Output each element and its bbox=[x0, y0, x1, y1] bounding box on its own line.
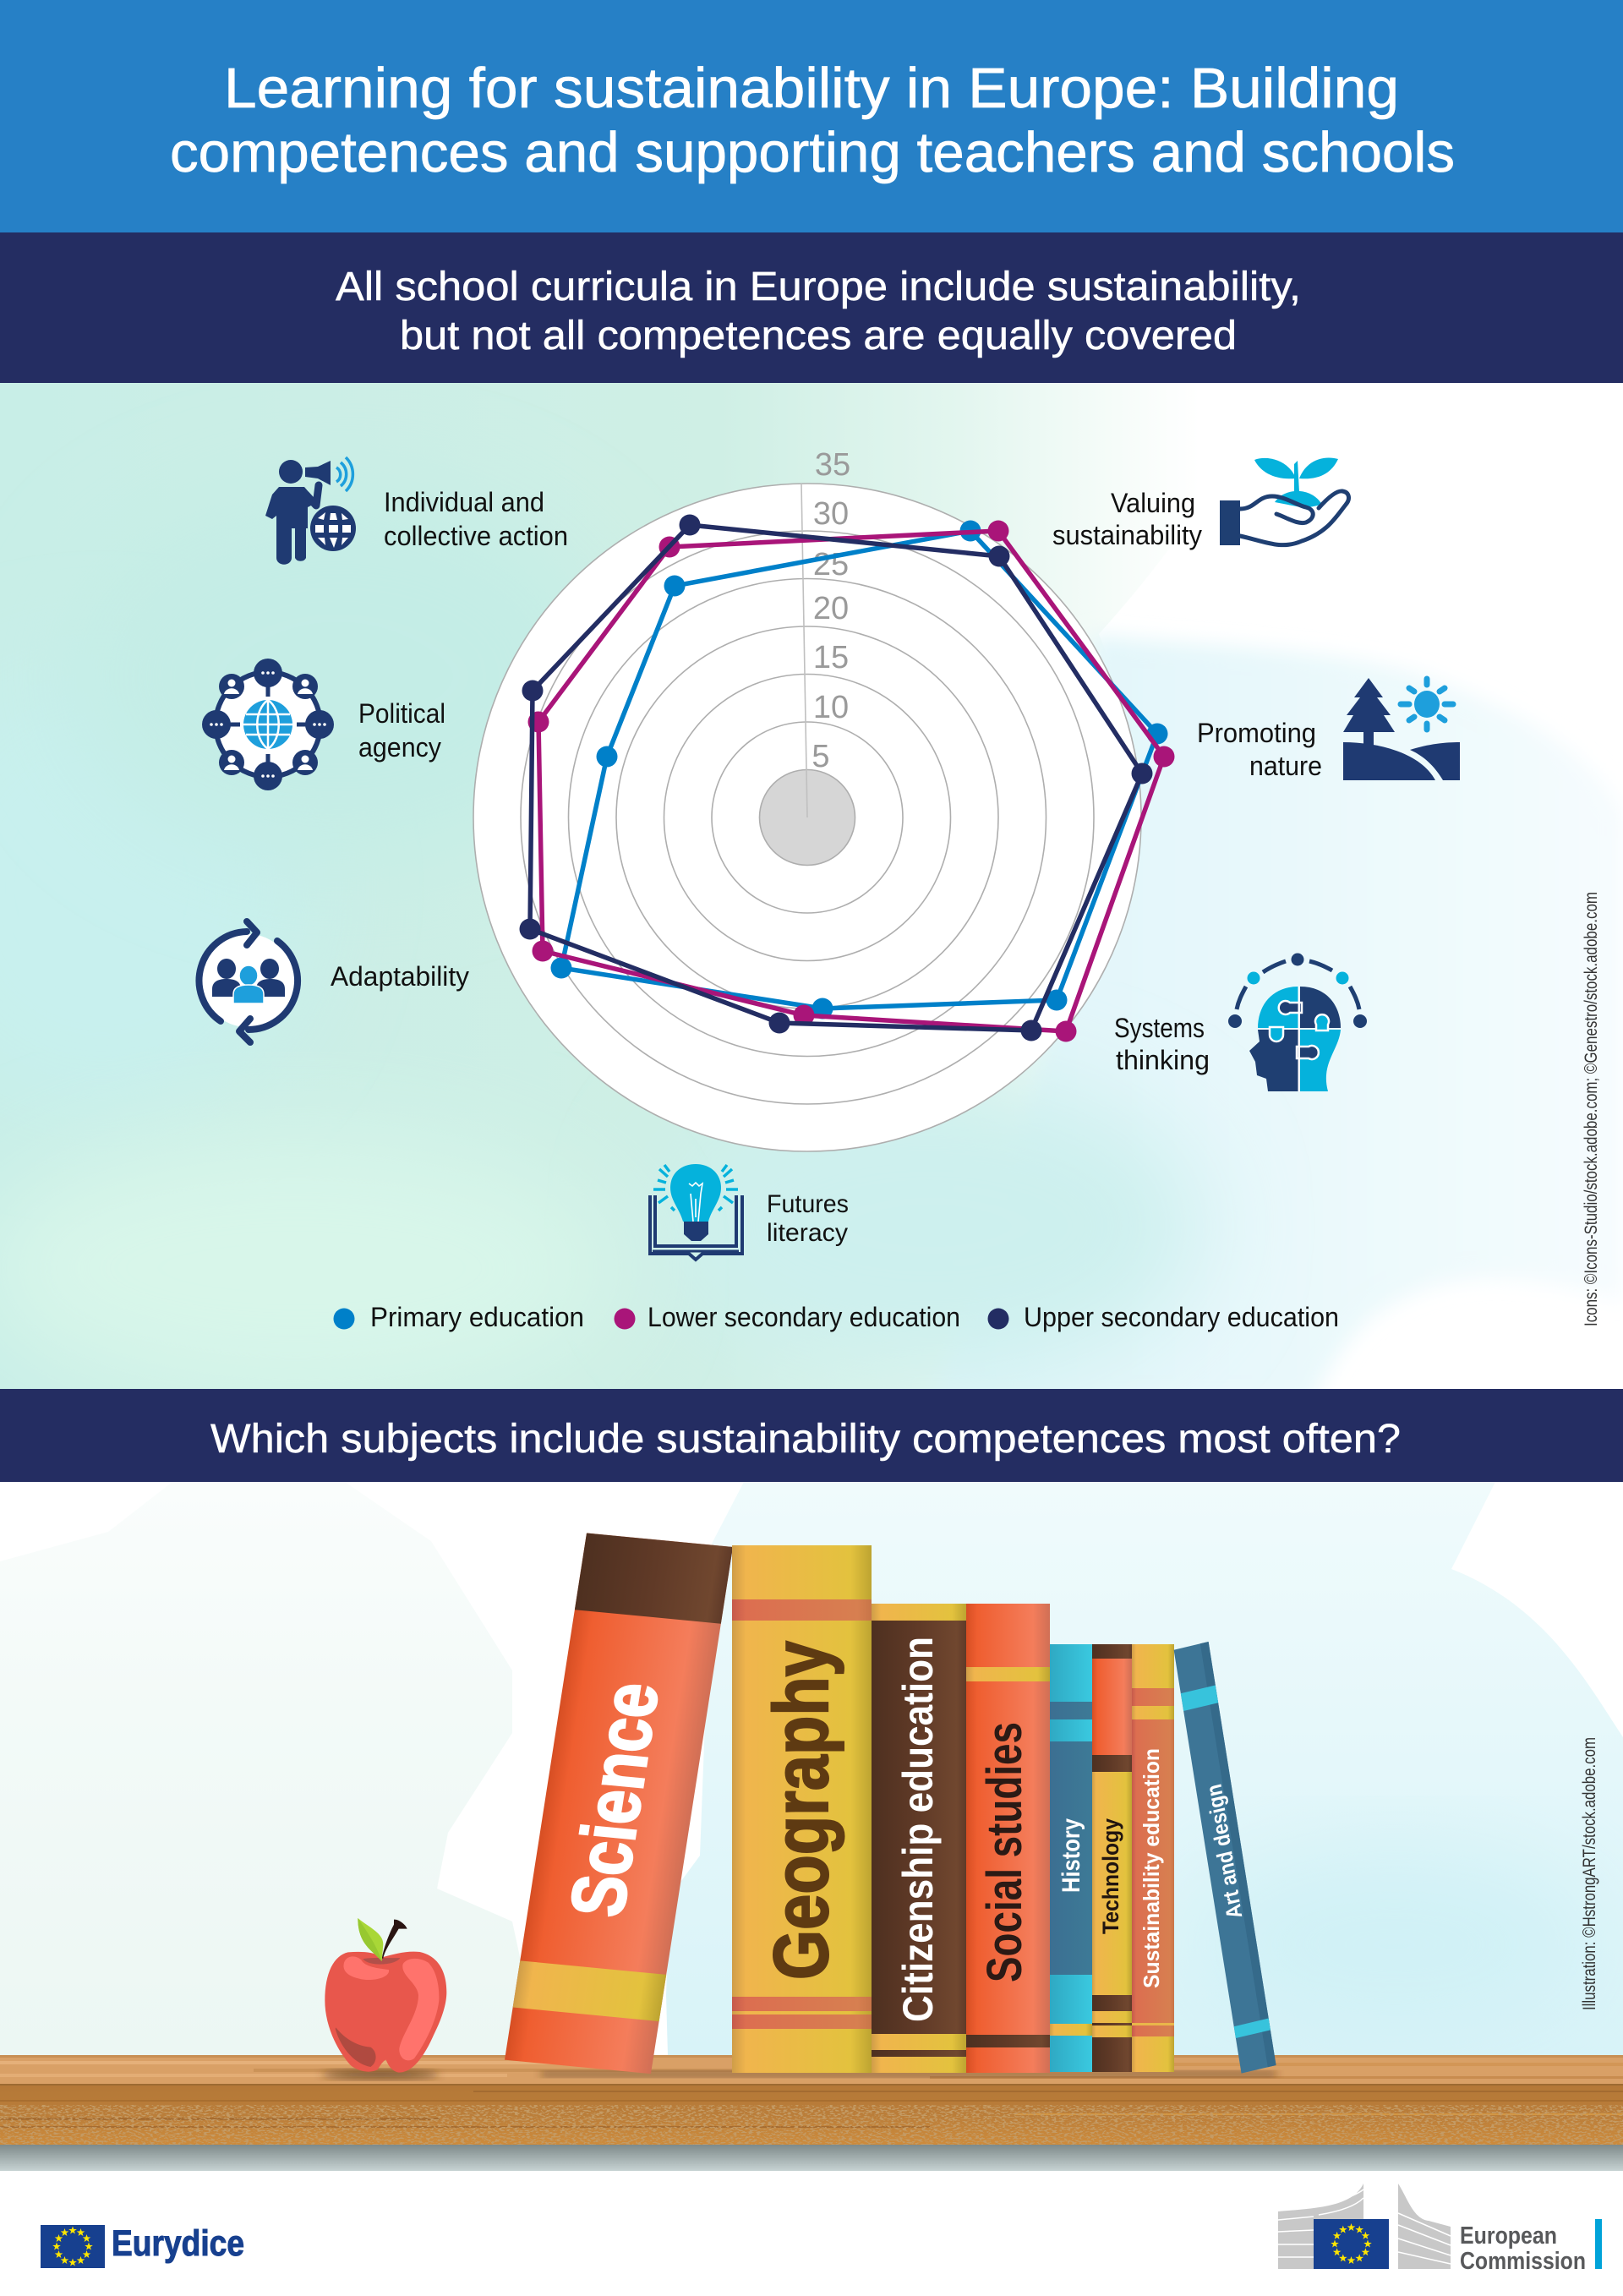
panel: bookshelf scene bbox=[0, 1482, 1623, 2171]
icon: systems thinking head puzzle bbox=[1228, 954, 1367, 1091]
axis scale labels: 25 bbox=[813, 547, 849, 582]
subtitle banner: but not all competences are equally covered bbox=[400, 314, 1237, 358]
label: valuing sustainability: sustainability bbox=[1052, 520, 1202, 550]
legend: Lower secondary education bbox=[648, 1302, 960, 1332]
section heading: subjects: Which subjects include sustainability competences most often? bbox=[210, 1417, 1401, 1462]
book: social studies: Social studies bbox=[977, 1722, 1032, 1982]
book: science: Science bbox=[555, 1679, 675, 1921]
label: futures literacy: literacy bbox=[767, 1219, 848, 1247]
title banner: competences and supporting teachers and schools bbox=[170, 121, 1455, 184]
book: citizenship education: Citizenship education bbox=[894, 1637, 942, 2022]
book: sustainability education: Sustainability education bbox=[1139, 1748, 1164, 1988]
icon: promoting nature bbox=[1343, 678, 1460, 780]
book: art and design: Art and design bbox=[1201, 1782, 1247, 1922]
book: geography bbox=[732, 1545, 872, 2073]
subtitle banner: All school curricula in Europe include sustainability, bbox=[336, 265, 1301, 309]
book: citizenship education bbox=[872, 1604, 966, 2073]
section heading: subjects bbox=[0, 1389, 1623, 1482]
axis scale labels: 5 bbox=[812, 739, 830, 774]
series: lower secondary education bbox=[527, 521, 1175, 1041]
credit: illustration: Illustration: ©HstrongART/stock.adobe.com bbox=[1580, 1737, 1599, 2010]
radar chart bbox=[473, 447, 1175, 1151]
icon: adaptability bbox=[199, 921, 298, 1042]
label: individual and collective action: collective action bbox=[384, 521, 568, 551]
book: technology: Technology bbox=[1098, 1818, 1123, 1934]
icon: person with megaphone and globe bbox=[265, 457, 356, 565]
label: promoting nature: Promoting bbox=[1197, 718, 1316, 748]
label: systems thinking: Systems bbox=[1114, 1013, 1205, 1043]
label: political agency bbox=[358, 698, 445, 763]
label: futures literacy: Futures bbox=[767, 1190, 849, 1218]
book: geography: Geography bbox=[758, 1641, 844, 1980]
logo: European Commission: Commission bbox=[1460, 2248, 1586, 2275]
shelf bbox=[0, 2055, 1623, 2171]
logo: European Commission: European bbox=[1460, 2222, 1557, 2250]
book: art and design bbox=[1174, 1642, 1276, 2074]
book: history: History bbox=[1057, 1818, 1085, 1893]
logo: Eurydice bbox=[41, 2223, 244, 2268]
book: science bbox=[505, 1533, 733, 2074]
label: individual and collective action bbox=[384, 487, 568, 551]
series: upper secondary education bbox=[519, 514, 1153, 1041]
label: futures literacy bbox=[767, 1190, 849, 1247]
series: primary education bbox=[551, 521, 1168, 1020]
axis scale labels: 10 bbox=[813, 690, 849, 725]
label: promoting nature bbox=[1197, 718, 1322, 781]
credit: icons: Icons: ©Icons-Studio/stock.adobe.com; ©Genestro/stock.adobe.com bbox=[1582, 892, 1601, 1326]
legend: Primary education bbox=[370, 1302, 584, 1332]
book: history bbox=[1050, 1644, 1092, 2072]
subtitle banner bbox=[0, 232, 1623, 383]
book: social studies bbox=[966, 1604, 1050, 2073]
label: systems thinking bbox=[1114, 1013, 1210, 1075]
label: valuing sustainability: Valuing bbox=[1111, 488, 1195, 518]
logo: Eurydice: Eurydice bbox=[112, 2223, 244, 2264]
label: valuing sustainability bbox=[1052, 488, 1202, 550]
logo: European Commission bbox=[1278, 2184, 1602, 2275]
legend bbox=[333, 1302, 1339, 1332]
book: sustainability education bbox=[1132, 1644, 1174, 2072]
legend: Upper secondary education bbox=[1024, 1302, 1339, 1332]
axis scale labels: 15 bbox=[813, 640, 849, 675]
axis scale labels: 20 bbox=[813, 591, 849, 626]
label: promoting nature: nature bbox=[1249, 751, 1322, 781]
label: systems thinking: thinking bbox=[1116, 1045, 1210, 1075]
title banner: Learning for sustainability in Europe: Building bbox=[224, 57, 1399, 120]
panel: radar chart section bbox=[0, 383, 1623, 1403]
axis scale labels: 30 bbox=[813, 496, 849, 532]
illustration: apple bbox=[325, 1918, 446, 2073]
label: adaptability: Adaptability bbox=[331, 961, 469, 992]
label: political agency: Political bbox=[358, 698, 445, 729]
label: political agency: agency bbox=[358, 732, 441, 763]
title banner bbox=[0, 0, 1623, 232]
icon: valuing sustainability hand and plant bbox=[1220, 457, 1348, 545]
axis scale labels: 35 bbox=[815, 447, 850, 483]
label: individual and collective action: Individual and bbox=[384, 487, 544, 517]
icon: political agency network bbox=[202, 659, 334, 790]
book: technology bbox=[1092, 1644, 1132, 2072]
axis scale labels bbox=[812, 447, 850, 774]
icon: futures literacy bulb on book bbox=[650, 1164, 742, 1260]
